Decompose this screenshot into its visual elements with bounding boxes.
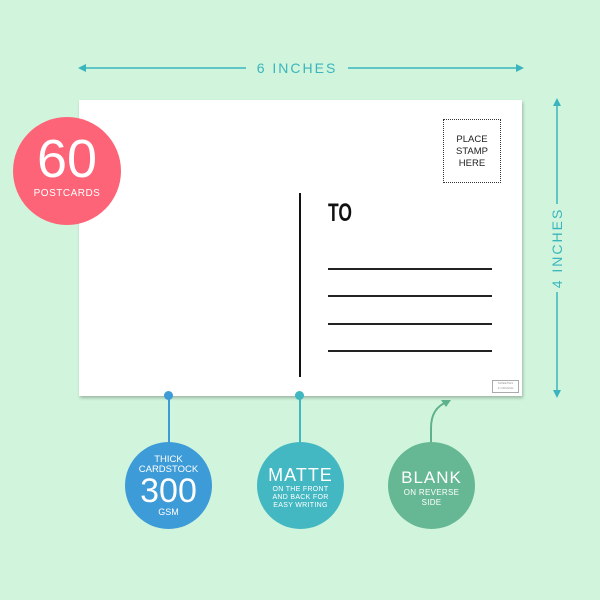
circle: 300 gsm: CARDSTOCK: [139, 464, 198, 475]
circle: 300 gsm: GSM: [158, 507, 179, 517]
stamp box: HERE: [459, 158, 485, 169]
circle: blank: SIDE: [422, 498, 441, 507]
circle: blank: BLANK: [401, 468, 462, 487]
connector: thick cardstock: [164, 391, 173, 442]
postcard: [79, 100, 522, 396]
stamp box: PLACE: [456, 134, 488, 145]
circle: matte: MATTE: [268, 465, 333, 485]
width dimension arrow: 6 INCHES: [257, 60, 337, 76]
divider line: [299, 193, 301, 377]
circle: matte: [257, 442, 344, 529]
logo mark: & ORANGE: [498, 386, 513, 390]
connector: matte: [295, 391, 304, 442]
badge: 60 postcards: POSTCARDS: [34, 188, 100, 199]
arrow: blank reverse: [430, 400, 451, 442]
circle: 300 gsm: THICK: [154, 454, 183, 465]
stamp box: STAMP: [456, 146, 488, 157]
badge: 60 postcards: [13, 117, 121, 225]
circle: 300 gsm: [125, 442, 212, 529]
logo mark: [492, 380, 519, 393]
width dimension arrow: [78, 60, 524, 76]
stamp box: [443, 119, 501, 183]
circle: blank: [388, 442, 475, 529]
badge: 60 postcards: 60: [37, 129, 97, 189]
circle: 300 gsm: 300: [140, 472, 197, 510]
height dimension arrow: 4 INCHES: [549, 208, 565, 288]
circle: blank: ON REVERSE: [404, 488, 459, 497]
TO label: TO: [328, 199, 352, 227]
circle: matte: ON THE FRONT: [272, 486, 328, 493]
address lines: [328, 268, 492, 352]
logo mark: SWEETIES: [498, 381, 513, 385]
height dimension arrow: [549, 98, 565, 398]
circle: matte: AND BACK FOR: [272, 494, 329, 501]
circle: matte: EASY WRITING: [273, 502, 328, 509]
